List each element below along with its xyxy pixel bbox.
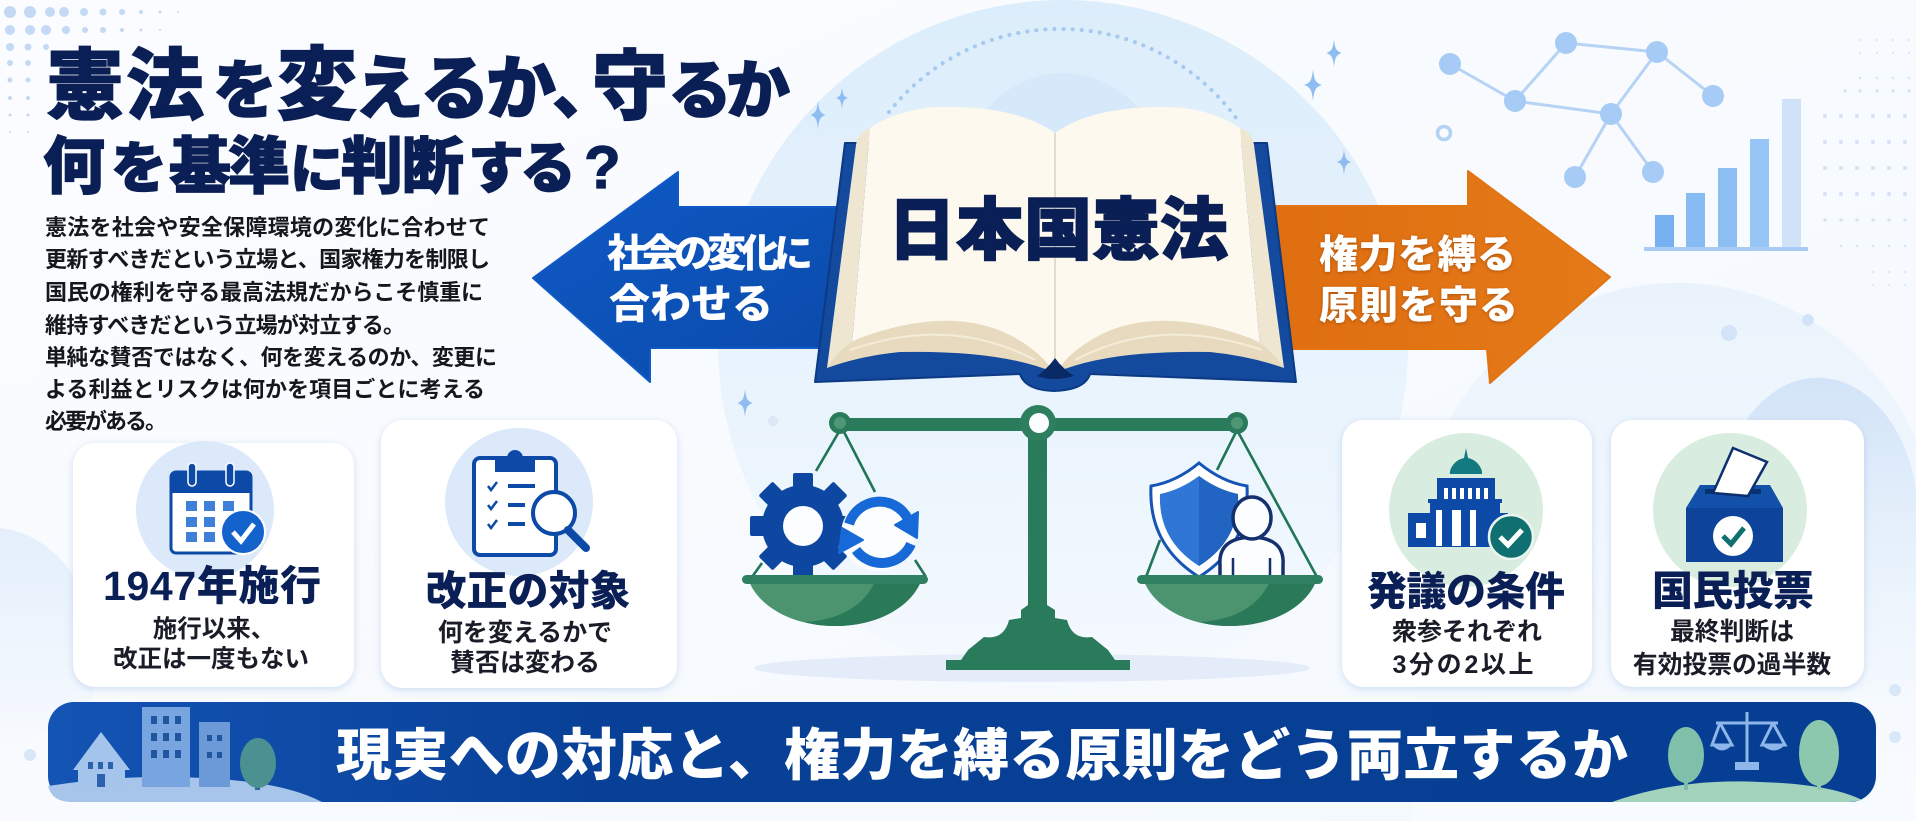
scene: hill, trees and scale: [1612, 712, 1862, 802]
body text: 単純な賛否ではなく、何を変えるのか、変更に: [45, 345, 497, 370]
icon: ballot box: [1686, 448, 1783, 562]
card text: 施行以来、: [153, 615, 275, 643]
title: る: [668, 55, 732, 127]
page edges: [827, 128, 1284, 368]
card: referendum: [1611, 420, 1864, 687]
page curl left: [827, 321, 1053, 372]
pivot ring: [1020, 405, 1056, 441]
right page: [1055, 107, 1260, 372]
title: る: [520, 137, 576, 200]
title: 準: [228, 133, 290, 202]
body text: 必要がある。: [45, 409, 167, 434]
arrow label: right: [1319, 234, 1518, 328]
scene: city: [48, 707, 322, 802]
left pan: [742, 575, 928, 626]
title: え: [354, 50, 424, 128]
body text: [45, 215, 497, 434]
card text: 有効投票の過半数: [1633, 651, 1831, 679]
card text: [113, 615, 309, 673]
bar chart icon: [1644, 99, 1808, 251]
knobs: [829, 412, 851, 434]
title: を: [213, 55, 277, 127]
curl lines: [850, 335, 1262, 360]
card: initiation conditions: [1342, 420, 1592, 687]
arrow label: right: 原則を守る: [1319, 285, 1518, 328]
card title: 1947年施行: [103, 563, 321, 609]
network graph icon: [1438, 32, 1724, 188]
dots: right pattern: [1823, 39, 1911, 286]
left page: [852, 107, 1055, 372]
bottom banner: [48, 702, 1876, 802]
title: 守: [592, 45, 668, 130]
icon: refresh arrows: [839, 497, 918, 571]
card text: 最終判断は: [1670, 618, 1794, 646]
icon: shield: [1151, 463, 1247, 577]
icon: clipboard and magnifier: [474, 450, 586, 555]
balance scale: [742, 405, 1323, 682]
title: 、: [552, 53, 618, 127]
icon backdrop: [136, 441, 274, 579]
card title: 発議の条件: [1367, 570, 1565, 614]
body text: 更新すべきだという立場と、国家権力を制限し: [45, 247, 490, 272]
icon: calendar: [171, 463, 265, 554]
sparkles: [737, 39, 1351, 417]
body text: 国民の権利を守る最高法規だからこそ慎重に: [45, 280, 483, 305]
body text: 憲法を社会や安全保障環境の変化に合わせて: [45, 215, 490, 240]
title: 法: [126, 42, 204, 130]
title: 基: [169, 133, 231, 202]
arrow: left blue: [533, 172, 880, 382]
card text: [1392, 618, 1542, 679]
arrow label: left: 合わせる: [609, 281, 773, 327]
icon backdrop: [445, 428, 593, 576]
card: amendment target: [381, 420, 677, 688]
title: す: [468, 137, 524, 200]
open book: [815, 107, 1296, 391]
arrow label: left: [607, 233, 813, 327]
title: 判: [341, 133, 403, 202]
book cover: [815, 143, 1296, 391]
card text: 何を変えるかで: [438, 619, 612, 647]
column and base: [946, 430, 1130, 670]
title: を: [111, 137, 167, 200]
title: 断: [402, 133, 464, 202]
arrow label: right: 権力を縛る: [1319, 234, 1516, 277]
icon: gear: [750, 473, 856, 579]
icon: parliament building: [1408, 448, 1533, 559]
card text: 3分の2以上: [1392, 651, 1534, 679]
title: か: [726, 55, 790, 127]
beam: [841, 418, 1237, 431]
card text: 賛否は変わる: [450, 649, 600, 677]
card title: 国民投票: [1652, 568, 1814, 614]
body text: よる利益とリスクは何かを項目ごとに考える: [45, 377, 485, 402]
title: 変: [277, 41, 357, 130]
card text: 改正は一度もない: [113, 645, 309, 673]
title: ?: [584, 134, 621, 201]
strings: [752, 430, 1317, 577]
arrow: right orange: [1250, 171, 1610, 383]
card text: 衆参それぞれ: [1392, 618, 1542, 646]
card text: [438, 619, 612, 677]
scale shadow: [754, 654, 1310, 682]
body text: 維持すべきだという立場が対立する。: [45, 313, 405, 338]
spine: [1054, 133, 1056, 360]
dots: top left: [4, 6, 179, 133]
dotted arc behind book: [889, 29, 1236, 118]
icon backdrop: [1653, 433, 1807, 587]
card title: 改正の対象: [426, 568, 630, 614]
title: か: [486, 50, 556, 128]
page curl right: [1057, 321, 1284, 372]
card: 1947: [73, 441, 354, 687]
title: に: [290, 140, 344, 200]
title: る: [420, 50, 490, 128]
title: 何: [43, 133, 105, 202]
card text: [1633, 618, 1831, 679]
right pan: [1137, 575, 1323, 626]
icon backdrop: [1389, 433, 1543, 587]
title: 憲: [46, 42, 124, 130]
title: [43, 41, 790, 202]
spine bottom: [1037, 358, 1074, 379]
icon: person: [1220, 497, 1283, 577]
book title: 日本国憲法: [888, 193, 1228, 269]
banner text: 現実への対応と、権力を縛る原則をどう両立するか: [336, 724, 1628, 787]
arrow label: left: 社会の変化に: [607, 233, 813, 276]
